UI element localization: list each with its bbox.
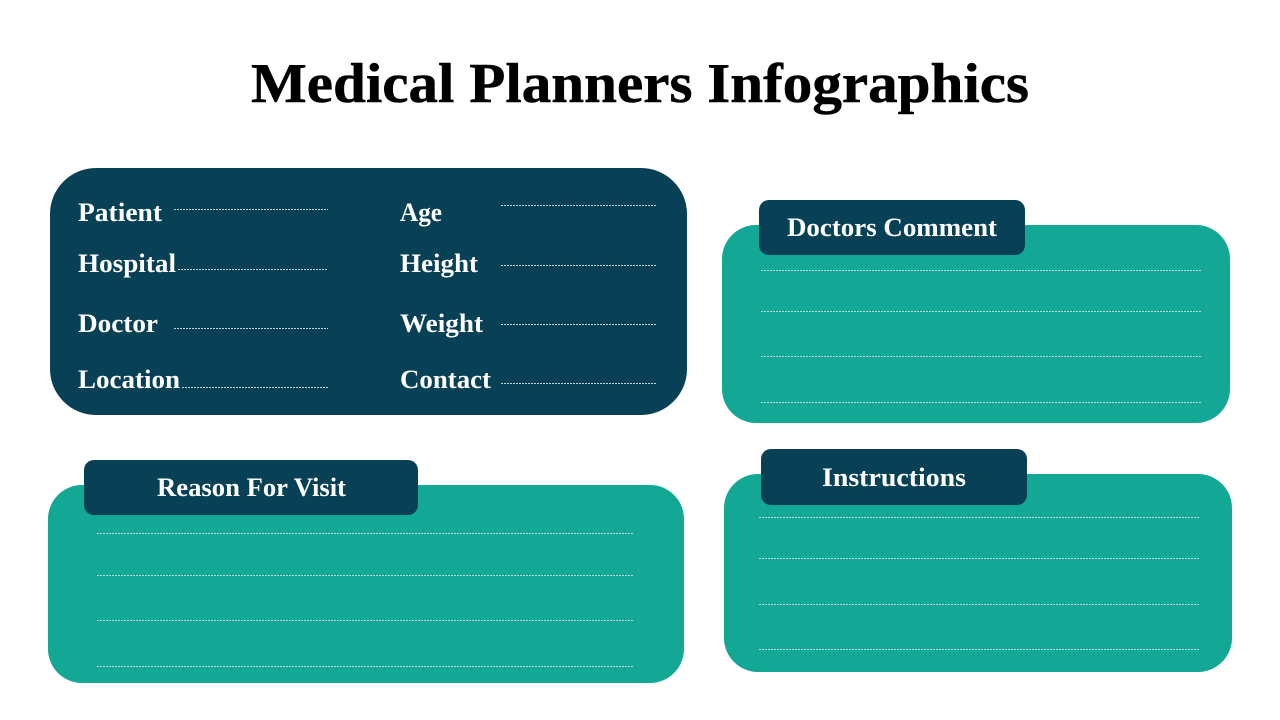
field: height: Height [400,249,478,278]
heading tab: instructions [761,449,1027,505]
field: location: Location [78,365,181,394]
heading tab: reason for visit [84,460,418,515]
field: patient: Patient [78,198,162,227]
field: contact: Contact [400,365,491,394]
field: age: Age [400,198,442,227]
panel: instructions [724,449,1232,672]
heading tab: reason for visit: Reason For Visit [157,473,346,502]
heading tab: instructions: Instructions [822,463,966,492]
panel: patient details [50,168,687,415]
heading tab: doctors comment: Doctors Comment [787,213,997,242]
heading tab: doctors comment [759,200,1025,255]
field: doctor: Doctor [78,309,158,338]
panel: reason for visit [48,460,684,683]
panel: doctors comment [722,200,1230,423]
field: hospital: Hospital [78,249,176,278]
field: weight: Weight [400,309,483,338]
title: Medical Planners Infographics [251,53,1029,115]
